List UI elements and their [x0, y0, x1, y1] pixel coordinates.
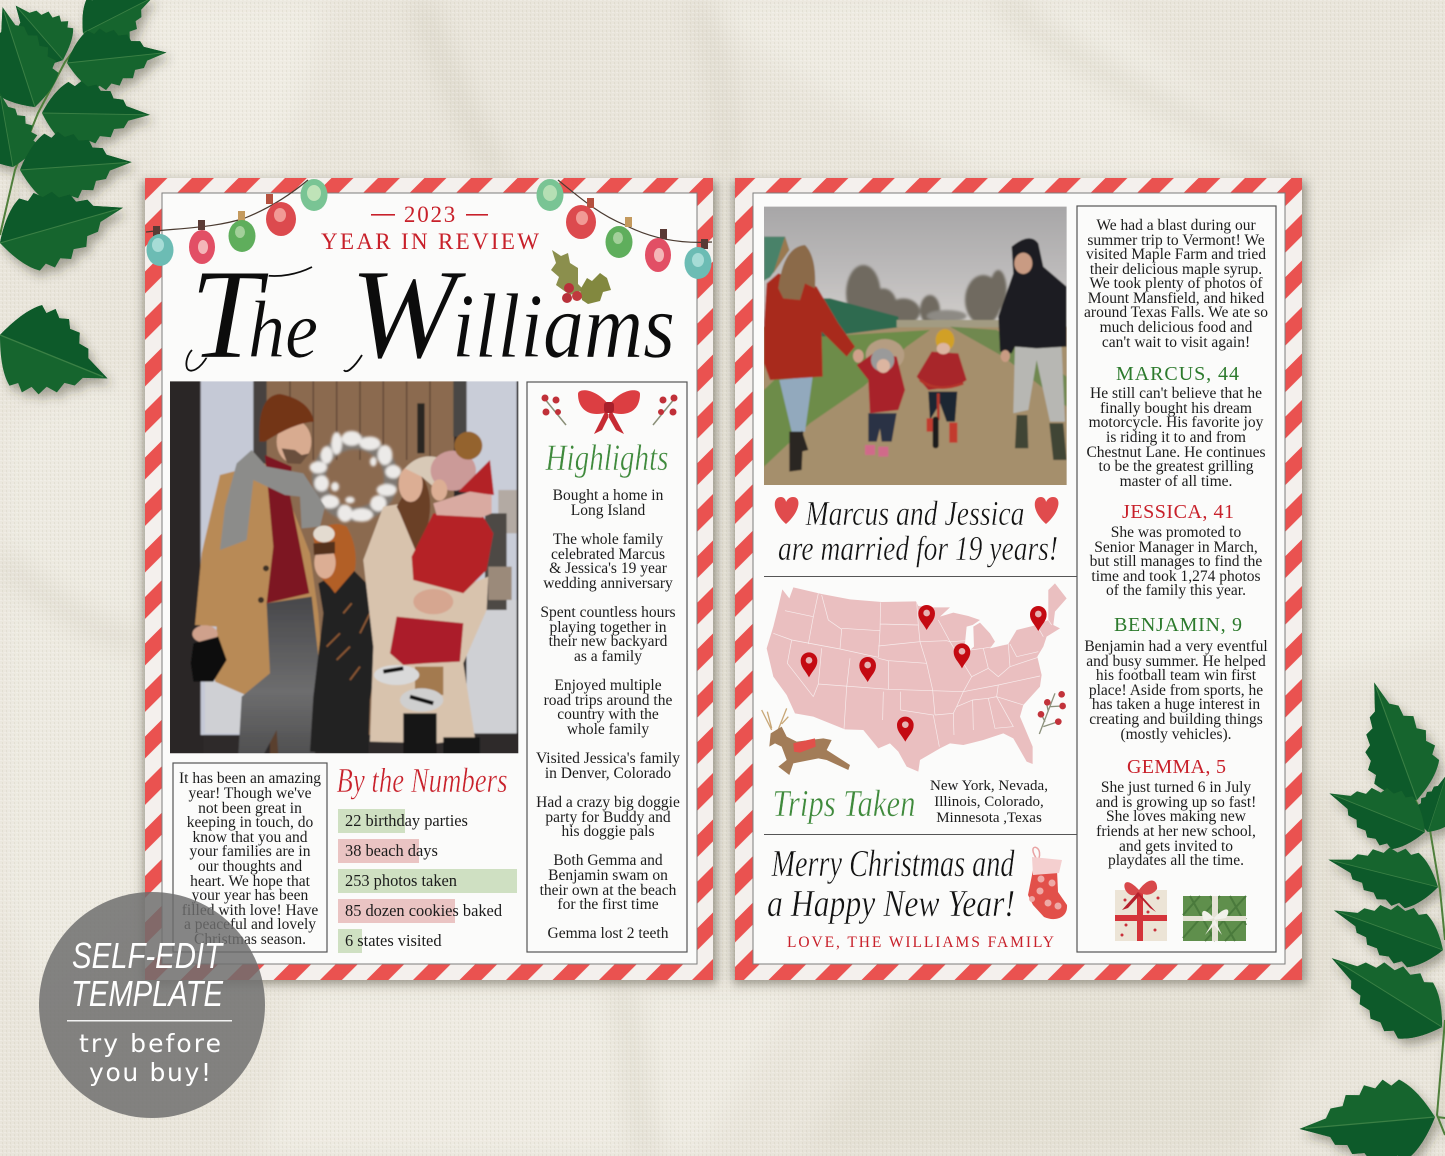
- text: Jessica bio: time and took 1,274 photos: [1091, 568, 1261, 585]
- text: Marcus bio: finally bought his dream: [1100, 400, 1252, 417]
- text: trip states: New York, Nevada,: [930, 778, 1048, 794]
- text: Gemma bio: and gets invited to: [1119, 838, 1233, 855]
- text: summer trip: [1084, 217, 1268, 351]
- heading: 2023: 2023: [404, 202, 457, 227]
- title: The Williams: W: [350, 243, 467, 385]
- text: summer trip: around Texas Falls. We ate so: [1084, 304, 1268, 321]
- icon: green gift: [1183, 896, 1246, 941]
- text: Jessica bio: but still manages to find the: [1090, 553, 1262, 570]
- man: [1013, 347, 1065, 422]
- icon: holly: [551, 250, 611, 304]
- title: The Williams: illiams: [452, 275, 675, 377]
- text: christmas greeting: [767, 843, 1015, 925]
- text: highlights list: playing together in: [549, 619, 667, 636]
- text: highlights list: Bought a home in: [553, 487, 664, 504]
- text: highlights list: Spent countless hours: [540, 604, 676, 621]
- text: highlights list: Enjoyed multiple: [554, 677, 662, 694]
- chart: by the numbers bars: 22 birthday parties: [345, 811, 468, 830]
- panel: greeting box: It has been an amazing: [179, 770, 321, 787]
- text: Benjamin bio: and busy summer. He helped: [1086, 653, 1266, 670]
- text: summer trip: summer trip to Vermont! We: [1087, 232, 1265, 249]
- panel: family stories column: [1077, 206, 1276, 952]
- badge: self-edit template: [39, 892, 265, 1118]
- text: highlights list: Gemma lost 2 teeth: [548, 925, 669, 942]
- badge: self-edit template: SELF-EDIT: [72, 935, 224, 976]
- wreath: [310, 431, 401, 522]
- woman: [363, 503, 488, 743]
- title: The Williams: [186, 243, 675, 385]
- text: summer trip: Mount Mansfield, and hiked: [1088, 290, 1264, 307]
- text: Benjamin bio: place! Aside from sports, he: [1089, 682, 1263, 699]
- text: highlights list: country with the: [557, 706, 659, 723]
- heading: Jessica: JESSICA, 41: [1122, 501, 1234, 523]
- heading: 2023: [371, 202, 488, 227]
- badge: self-edit template: TEMPLATE: [71, 973, 224, 1014]
- text: Jessica bio: Senior Manager in March,: [1094, 539, 1258, 556]
- text: highlights list: for the first time: [557, 896, 659, 913]
- text: Marcus bio: [1086, 385, 1266, 490]
- text: Benjamin bio: (mostly vehicles).: [1120, 726, 1232, 743]
- child 1: [864, 338, 904, 366]
- panel: greeting box: filled with love! Have: [182, 902, 318, 919]
- panel: greeting box: our thoughts and: [198, 858, 302, 875]
- text: highlights list: Benjamin swam on: [548, 867, 668, 884]
- heading: highlights: Highlights: [545, 438, 668, 479]
- text: highlights list: as a family: [574, 648, 642, 665]
- text: highlights list: Visited Jessica's family: [536, 750, 680, 767]
- heading: Benjamin: BENJAMIN, 9: [1114, 614, 1242, 636]
- badge: self-edit template: try before: [79, 1029, 221, 1058]
- heading: year in review: YEAR IN REVIEW: [321, 229, 539, 254]
- chart: by the numbers bars: 253 photos taken: [345, 871, 457, 890]
- text: Gemma bio: She loves making new: [1106, 808, 1247, 825]
- photo: family at front door: [167, 380, 520, 755]
- panel: highlights box: [527, 382, 687, 952]
- text: summer trip: visited Maple Farm and tried: [1086, 246, 1266, 263]
- text: married caption: Marcus and Jessica: [805, 494, 1024, 533]
- child 2 on bike: [917, 352, 967, 390]
- icon: right string lights: [536, 179, 712, 279]
- boy: [310, 570, 374, 753]
- icon: red bow: [578, 390, 640, 434]
- text: highlights list: wedding anniversary: [543, 575, 673, 592]
- heading: Gemma: GEMMA, 5: [1127, 756, 1226, 778]
- icon: berry sprig left: [542, 394, 566, 425]
- text: highlights list: celebrated Marcus: [551, 546, 665, 563]
- panel: greeting box: Christmas season.: [194, 931, 306, 948]
- panel: greeting box: know that you and: [193, 829, 308, 846]
- photo: family walking on country road: [760, 203, 1070, 490]
- text: highlights list: Had a crazy big doggie: [536, 794, 680, 811]
- text: Jessica bio: of the family this year.: [1106, 582, 1246, 599]
- text: highlights list: party for Buddy and: [545, 809, 671, 826]
- heading: Marcus: MARCUS, 44: [1116, 363, 1239, 385]
- text: trip states: Minnesota ,Texas: [936, 810, 1042, 826]
- title: The Williams: he: [248, 284, 318, 375]
- chart: by the numbers bars: 6 states visited: [345, 931, 442, 950]
- icon: berry sprig on map: [1038, 691, 1066, 734]
- text: married caption: [778, 494, 1058, 568]
- text: summer trip: can't wait to visit again!: [1102, 334, 1250, 351]
- text: Gemma bio: playdates all the time.: [1108, 852, 1244, 869]
- badge: self-edit template: you buy!: [89, 1058, 211, 1087]
- text: summer trip: We took plenty of photos of: [1089, 275, 1263, 292]
- panel: card 2 back page: [733, 178, 1306, 984]
- panel: greeting box: not been great in: [198, 800, 302, 817]
- divider top: [764, 576, 1077, 577]
- leaves: top left branch: [0, 0, 170, 420]
- panel: greeting box: heart. We hope that: [190, 873, 311, 890]
- man: [195, 463, 323, 698]
- text: highlights list: [536, 487, 680, 942]
- text: highlights list: in Denver, Colorado: [545, 765, 671, 782]
- text: highlights list: their own at the beach: [540, 882, 677, 899]
- chart: by the numbers bars: 38 beach days: [345, 841, 438, 860]
- heading: by the numbers: By the Numbers: [336, 761, 508, 800]
- text: Gemma bio: [1096, 779, 1256, 869]
- text: Benjamin bio: his football team win first: [1096, 667, 1257, 684]
- icon: map pins: [801, 605, 1047, 742]
- text: Marcus bio: is riding it to and from: [1106, 429, 1246, 446]
- text: highlights list: Both Gemma and: [553, 852, 663, 869]
- text: Benjamin bio: has taken a huge interest in: [1092, 696, 1260, 713]
- leaves: bottom right branch: [1296, 670, 1445, 1156]
- text: summer trip: their delicious maple syrup.: [1090, 261, 1262, 278]
- text: Gemma bio: and is growing up so fast!: [1096, 794, 1256, 811]
- panel: greeting box: keeping in touch, do: [187, 814, 314, 831]
- text: Marcus bio: Chestnut Lane. He continues: [1086, 444, 1266, 461]
- icon: berry sprig right: [653, 394, 678, 425]
- text: signature: LOVE, THE WILLIAMS FAMILY: [787, 934, 1054, 951]
- text: trip states: [930, 778, 1048, 826]
- text: Gemma bio: friends at her new school,: [1096, 823, 1256, 840]
- icon: heart left: [775, 497, 798, 524]
- text: highlights list: Long Island: [571, 502, 645, 519]
- title: The Williams: T: [190, 243, 269, 385]
- text: highlights list: his doggie pals: [562, 823, 654, 840]
- icon: red gift: [1115, 880, 1167, 941]
- text: highlights list: road trips around the: [544, 692, 672, 709]
- text: trip states: Illinois, Colorado,: [934, 794, 1044, 810]
- text: highlights list: & Jessica's 19 year: [549, 560, 668, 577]
- text: Benjamin bio: [1084, 638, 1268, 743]
- text: highlights list: whole family: [567, 721, 649, 738]
- text: Benjamin bio: Benjamin had a very eventful: [1084, 638, 1268, 655]
- divider bottom: [764, 834, 1077, 835]
- icon: reindeer: [762, 708, 850, 775]
- text: Marcus bio: motorcycle. His favorite joy: [1089, 414, 1264, 431]
- text: Marcus bio: to be the greatest grilling: [1099, 458, 1254, 475]
- toddler: [431, 451, 476, 491]
- text: christmas greeting: Merry Christmas and: [771, 843, 1015, 885]
- heading: trips taken: Trips Taken: [772, 783, 916, 825]
- woman: [779, 377, 813, 432]
- chart: by the numbers bars: [338, 809, 517, 953]
- text: summer trip: We had a blast during our: [1096, 217, 1256, 234]
- text: christmas greeting: a Happy New Year!: [767, 883, 1015, 925]
- panel: greeting box: [173, 763, 327, 952]
- map: trips taken US map: [767, 583, 1067, 772]
- panel: greeting box: year! Though we've: [188, 785, 312, 802]
- text: highlights list: The whole family: [553, 531, 663, 548]
- icon: stocking: [1028, 847, 1067, 919]
- panel: greeting box: your families are in: [190, 843, 311, 860]
- chart: by the numbers bars: 85 dozen cookies baked: [345, 901, 502, 920]
- text: Gemma bio: She just turned 6 in July: [1101, 779, 1251, 796]
- text: married caption: are married for 19 years!: [778, 529, 1058, 568]
- panel: greeting box: a peaceful and lovely: [184, 916, 316, 933]
- icon: left string lights: [146, 179, 328, 266]
- text: summer trip: much delicious food and: [1100, 319, 1253, 336]
- panel: card 1 front page: [143, 178, 717, 984]
- text: Benjamin bio: creating and building things: [1089, 711, 1263, 728]
- text: Jessica bio: She was promoted to: [1111, 524, 1241, 541]
- text: Marcus bio: He still can't believe that he: [1090, 385, 1262, 402]
- text: Marcus bio: master of all time.: [1120, 473, 1232, 490]
- panel: greeting box: your year has been: [192, 887, 309, 904]
- text: highlights list: their new backyard: [549, 633, 668, 650]
- text: Jessica bio: [1090, 524, 1262, 599]
- icon: heart right: [1035, 497, 1058, 524]
